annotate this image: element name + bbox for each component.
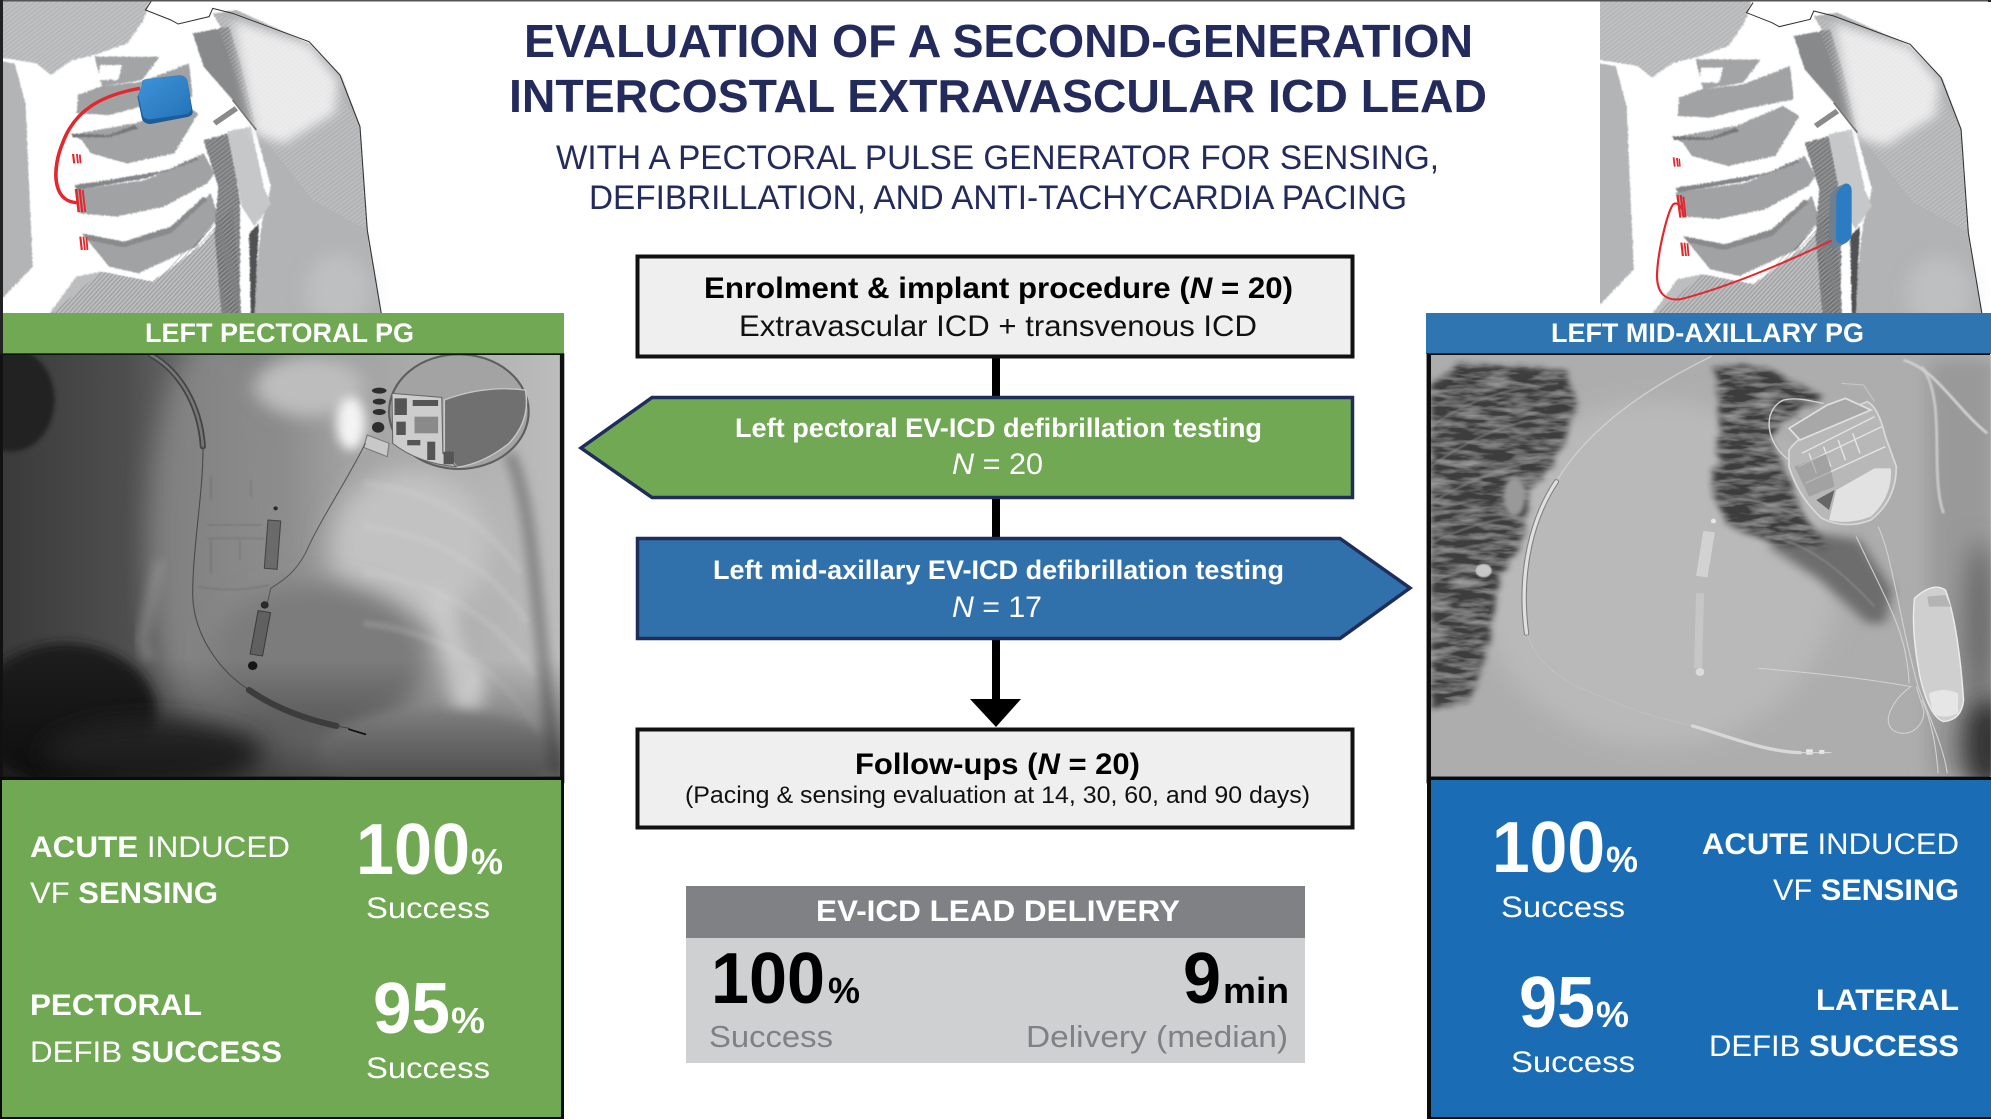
stat: 95% success: 95 xyxy=(373,969,450,1049)
title: EVALUATION OF A SECOND-GENERATION xyxy=(524,15,1473,67)
panel: EV-ICD lead delivery xyxy=(686,886,1305,1063)
lead loops xyxy=(1758,527,1947,773)
panel heading xyxy=(686,886,1305,938)
label: pectoral defib success: PECTORAL xyxy=(30,989,202,1022)
stat: 100% success xyxy=(1492,808,1638,924)
stat: 95% success: Success xyxy=(366,1052,490,1085)
icon: blue pulse generator xyxy=(137,75,193,124)
label: acute induced VF sensing: VF SENSING xyxy=(30,877,218,910)
arrow box: left pectoral testing: N = 20 xyxy=(952,448,1043,481)
box: enrolment xyxy=(638,256,1352,356)
stat: 100% success: % xyxy=(1606,839,1638,880)
panel header: left pectoral PG: LEFT PECTORAL PG xyxy=(145,318,414,348)
label: pectoral defib success xyxy=(30,989,282,1069)
stat: 100% success: 100 xyxy=(356,810,470,890)
label: pectoral defib success: DEFIB SUCCESS xyxy=(30,1036,282,1069)
subtitle xyxy=(556,139,1439,217)
label: acute induced VF sensing: ACUTE INDUCED xyxy=(30,831,290,864)
red lead xyxy=(1657,203,1832,299)
box: enrolment: Enrolment & implant procedure ( N = 20) xyxy=(704,272,1293,305)
panel header: left mid-axillary PG: LEFT MID-AXILLARY PG xyxy=(1551,318,1864,348)
transvenous lead xyxy=(1696,519,1716,676)
label: acute induced VF sensing xyxy=(30,831,290,910)
arrow box: left pectoral testing: Left pectoral EV-ICD defibrillation testing xyxy=(735,413,1262,443)
subtitle: DEFIBRILLATION, AND ANTI-TACHYCARDIA PACING xyxy=(589,179,1407,217)
subtitle: WITH A PECTORAL PULSE GENERATOR FOR SENSING, xyxy=(556,139,1439,177)
transvenous lead with coils xyxy=(248,443,365,670)
lungs xyxy=(1431,363,1827,708)
panel: left pectoral results xyxy=(0,777,564,1119)
illustration: left pectoral pulse generator on torso xyxy=(0,0,382,327)
stat: 100% success xyxy=(709,939,860,1054)
stat: 95% success: Success xyxy=(1511,1046,1635,1079)
label: lateral defib success xyxy=(1709,984,1959,1063)
icon: blue side-on pulse generator xyxy=(1828,183,1852,248)
flowchart xyxy=(581,256,1410,828)
panel header: left mid-axillary PG xyxy=(1426,313,1991,354)
transvenous ICD generator xyxy=(1769,383,1896,525)
stat: 9 min delivery xyxy=(1026,939,1289,1054)
red lead xyxy=(56,88,140,203)
box: follow-ups xyxy=(638,730,1352,828)
stat: 9 min delivery: Delivery (median) xyxy=(1026,1019,1288,1054)
stat: 9 min delivery: min xyxy=(1223,970,1289,1011)
stat: 100% success xyxy=(356,810,503,925)
panel: left mid-axillary results xyxy=(1427,777,1991,1119)
arrow box: left mid-axillary testing: Left mid-axillary EV-ICD defibrillation testing xyxy=(713,555,1284,585)
arrow box: left mid-axillary testing: N = 17 xyxy=(952,591,1042,624)
box: follow-ups: Follow-ups (N = 20) xyxy=(855,748,1140,781)
electrodes xyxy=(72,154,88,250)
panel heading: EV-ICD LEAD DELIVERY xyxy=(816,895,1180,928)
stat: 95% success: % xyxy=(451,1000,485,1041)
stat: 100% success: 100 xyxy=(711,939,825,1019)
stat: 100% success: Success xyxy=(709,1019,833,1054)
label: acute induced VF sensing xyxy=(1702,828,1959,907)
title xyxy=(509,15,1487,122)
box: enrolment: Extravascular ICD + transvenous ICD xyxy=(739,310,1257,343)
fluoroscopy image: left pectoral xyxy=(0,333,564,797)
chest X-ray image: left mid-axillary xyxy=(1427,353,1991,793)
panel header: left pectoral PG xyxy=(3,313,564,354)
illustration: left mid-axillary pulse generator on torso xyxy=(1587,0,1983,329)
EV-ICD generator xyxy=(1913,587,1964,722)
label: lateral defib success: LATERAL xyxy=(1816,984,1959,1017)
connector line xyxy=(992,497,1000,539)
EV-ICD lead xyxy=(1524,357,1831,755)
stat: 100% success: 100 xyxy=(1492,808,1605,888)
box: follow-ups: (Pacing & sensing evaluation at 14, 30, 60, and 90 days) xyxy=(685,782,1310,809)
lower right lung field xyxy=(1769,527,1893,623)
label: lateral defib success: DEFIB SUCCESS xyxy=(1709,1030,1959,1063)
stat: 95% success xyxy=(366,969,490,1085)
arrow box: left mid-axillary testing xyxy=(638,538,1410,638)
arrow box: left pectoral testing xyxy=(581,398,1352,498)
stat: 100% success: % xyxy=(471,841,503,882)
connector line xyxy=(992,358,1000,398)
label: acute induced VF sensing: ACUTE INDUCED xyxy=(1702,828,1959,861)
stat: 95% success: % xyxy=(1596,994,1629,1035)
stat: 9 min delivery: 9 xyxy=(1183,939,1221,1019)
stat: 100% success: Success xyxy=(1501,891,1625,924)
frame edges xyxy=(0,0,1991,354)
stat: 95% success: 95 xyxy=(1519,963,1595,1043)
EV-ICD lead xyxy=(151,355,365,734)
arrow down xyxy=(970,638,1021,727)
electrodes xyxy=(1673,157,1689,256)
stat: 95% success xyxy=(1511,963,1635,1079)
stat: 100% success: % xyxy=(828,970,860,1011)
title: INTERCOSTAL EXTRAVASCULAR ICD LEAD xyxy=(509,70,1487,122)
pulse generator xyxy=(364,354,529,469)
label: acute induced VF sensing: VF SENSING xyxy=(1773,874,1959,907)
stat: 100% success: Success xyxy=(366,892,490,925)
